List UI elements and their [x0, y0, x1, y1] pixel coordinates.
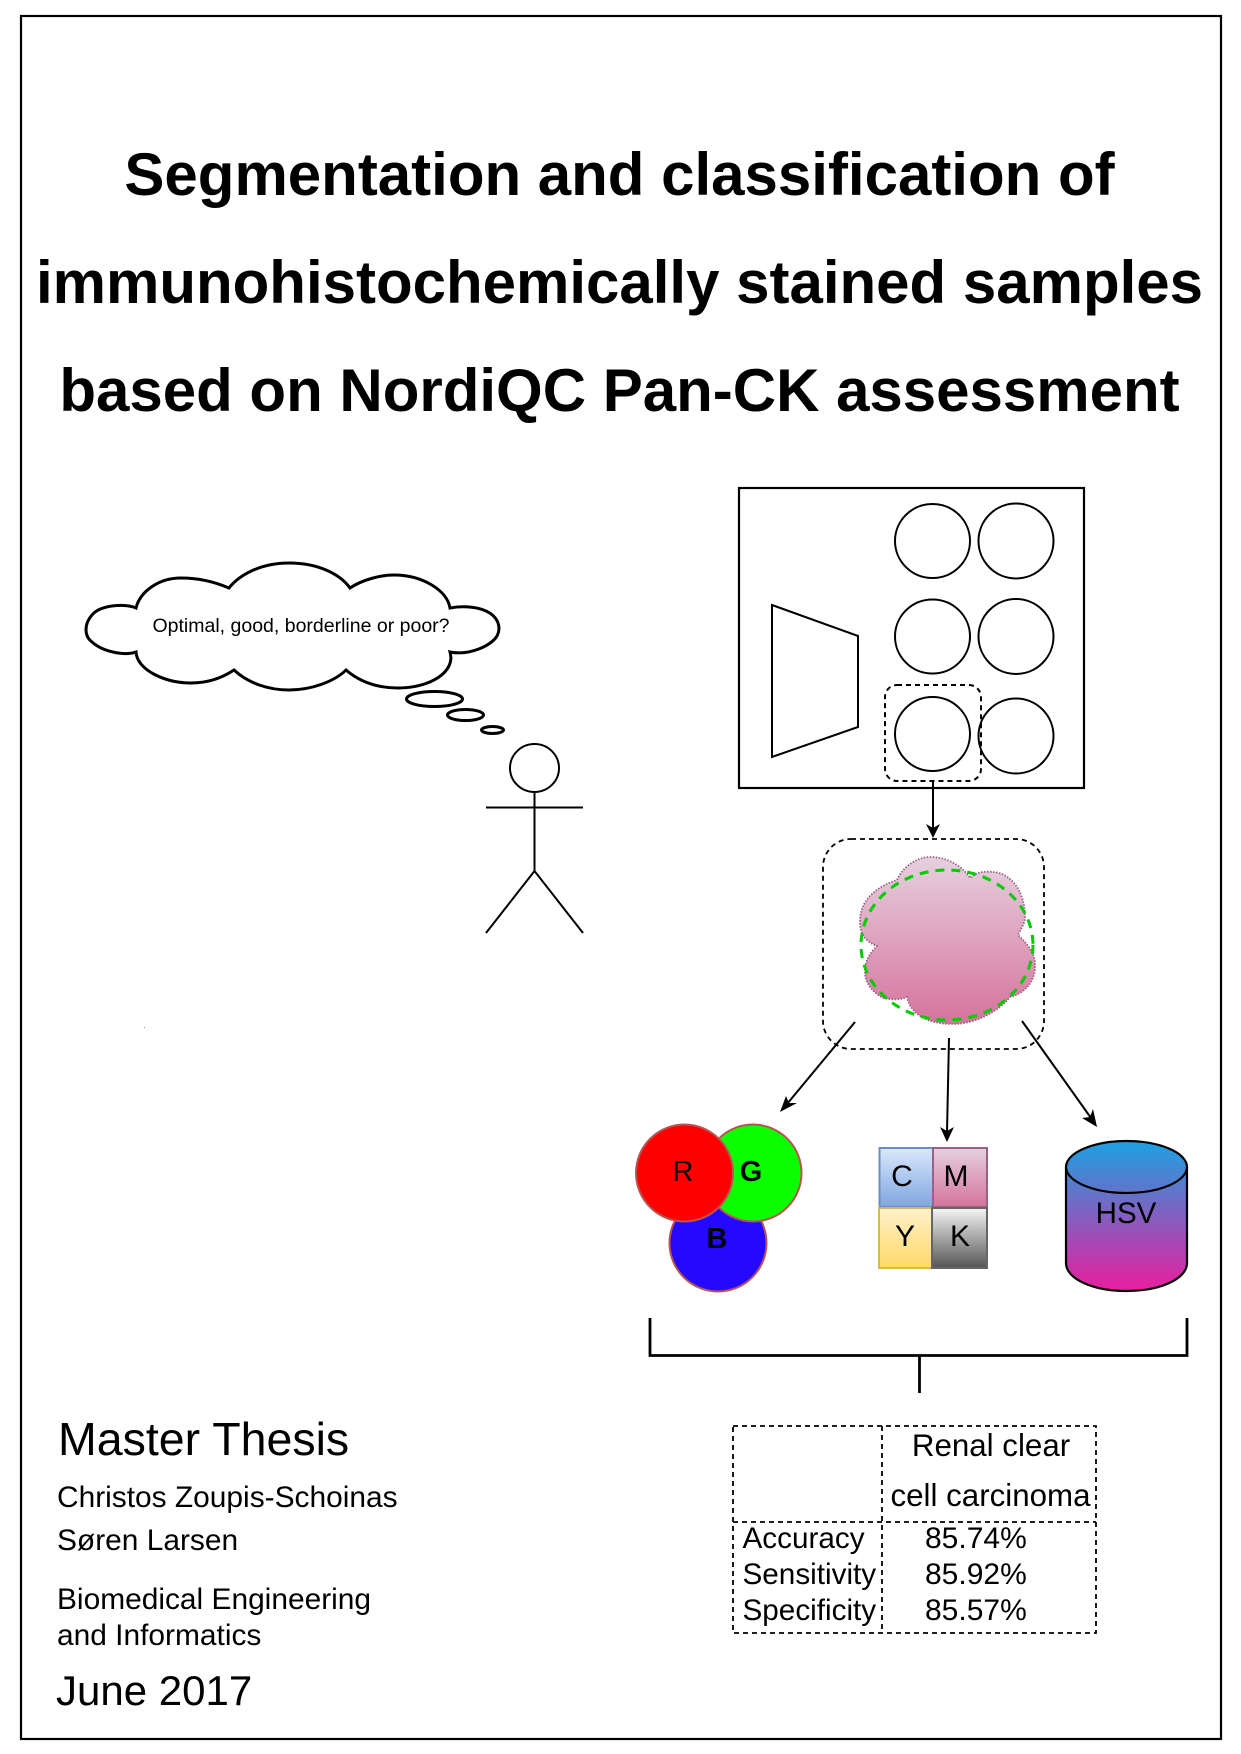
segmented sample panel — [823, 839, 1044, 1049]
RGB circles: G — [740, 1156, 762, 1188]
authors — [57, 1481, 398, 1557]
metric values — [925, 1522, 1027, 1627]
RGB circles — [636, 1124, 802, 1292]
tissue circles — [895, 504, 1054, 774]
programme: and Informatics — [57, 1619, 261, 1652]
results table — [733, 1426, 1096, 1633]
thesis heading: Master Thesis — [58, 1413, 349, 1465]
title: immunohistochemically stained samples — [36, 249, 1203, 316]
table grid — [733, 1426, 1096, 1633]
green segmentation ellipse — [861, 870, 1033, 1020]
column header: cell carcinoma — [890, 1478, 1091, 1513]
metric values: 85.74% — [925, 1522, 1027, 1555]
metric names — [742, 1522, 876, 1627]
column header: Renal clear — [912, 1428, 1070, 1463]
CMYK grid — [879, 1148, 987, 1268]
stray dot — [144, 1027, 145, 1028]
CMYK grid: K — [950, 1220, 970, 1253]
CMYK grid: C — [891, 1160, 913, 1193]
metric names: Specificity — [742, 1594, 876, 1627]
control trapezoid — [772, 605, 858, 757]
RGB circles: B — [707, 1223, 727, 1255]
thought dots — [406, 692, 504, 734]
HSV cylinder — [1066, 1141, 1187, 1291]
arrow: slide to sample — [926, 781, 940, 838]
column header — [890, 1428, 1091, 1513]
metric names: Accuracy — [742, 1522, 865, 1555]
metric names: Sensitivity — [742, 1558, 876, 1591]
arrow to CMYK — [940, 1038, 954, 1142]
arrows to colour spaces — [780, 1021, 1097, 1142]
metric values: 85.57% — [925, 1594, 1027, 1627]
dashed container — [823, 839, 1044, 1049]
metric values: 85.92% — [925, 1558, 1027, 1591]
title: based on NordiQC Pan-CK assessment — [59, 357, 1180, 424]
arrow to RGB — [780, 1022, 855, 1112]
question text: Optimal, good, borderline or poor? — [152, 615, 450, 637]
HSV cylinder: HSV — [1096, 1197, 1157, 1230]
cloud outline — [86, 563, 499, 690]
authors: Christos Zoupis-Schoinas — [57, 1481, 398, 1514]
bracket to results — [650, 1318, 1187, 1393]
date: June 2017 — [56, 1667, 252, 1714]
authors: Søren Larsen — [57, 1524, 238, 1557]
arrow to HSV — [1022, 1021, 1097, 1127]
programme — [57, 1583, 371, 1652]
title: Segmentation and classification of — [124, 141, 1116, 208]
tissue blob — [860, 857, 1035, 1024]
CMYK grid: M — [944, 1160, 968, 1193]
slide panel — [739, 488, 1084, 788]
CMYK grid: Y — [895, 1220, 915, 1253]
selected sample dashed box — [885, 685, 981, 781]
author block — [56, 1413, 398, 1714]
title — [36, 141, 1203, 424]
thought bubble — [86, 563, 504, 734]
stick figure — [486, 744, 583, 933]
programme: Biomedical Engineering — [57, 1583, 371, 1616]
RGB circles: R — [673, 1156, 693, 1188]
slide frame — [739, 488, 1084, 788]
